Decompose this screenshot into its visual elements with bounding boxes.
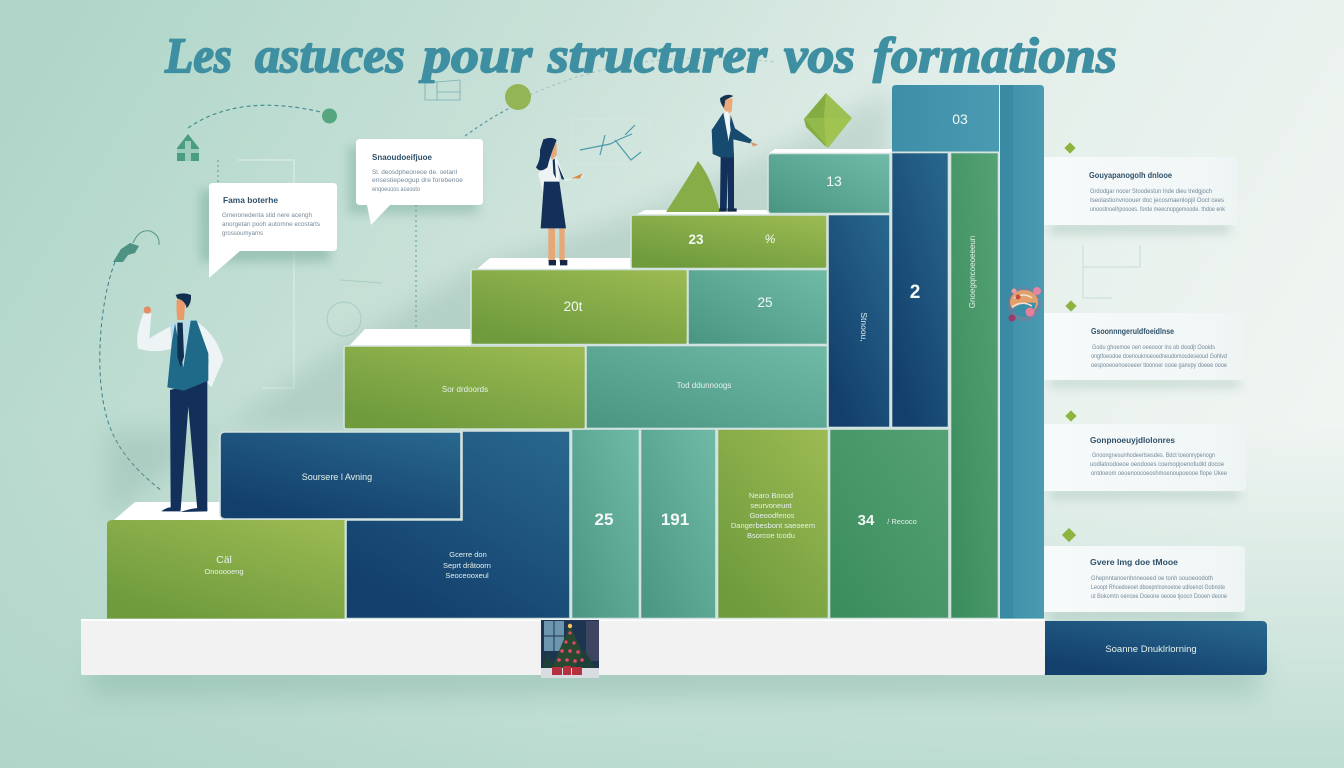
base label panel (1045, 621, 1267, 675)
block: olive text column: Nearo Bonod (749, 491, 793, 500)
callout 1 shadow and bubble (200, 183, 337, 278)
panel: card 2: Gsoonnngeruldfoeidlnse (1091, 326, 1174, 336)
panel: card 1 (1044, 142, 1237, 225)
block: olive base: Cäl (216, 554, 232, 566)
title: vos (784, 27, 855, 83)
base shelf (81, 619, 1045, 675)
block: blue 03: 03 (952, 111, 968, 127)
block: navy L shape: Gcerre don (449, 550, 487, 559)
block: olive text column: seurvoneunt (750, 501, 793, 510)
title: formations (873, 27, 1117, 83)
background line decorations (100, 58, 1140, 491)
panel: card 4: Leoopt Rhoedoeoet dboepnlnonoetoe udloenot Gobnote (1091, 584, 1225, 591)
title: pour (419, 27, 533, 83)
block: navy step (220, 432, 461, 519)
block: navy L shape: Seprt drâtoorn (443, 561, 491, 570)
block: navy vertical text (828, 214, 890, 428)
block: teal row 3 (688, 270, 828, 344)
callout 2 shadow and bubble (348, 139, 483, 225)
block: teal row 3: 25 (757, 295, 773, 310)
base shelf shadow (90, 660, 1260, 695)
block: teal row 2 (586, 346, 828, 428)
panel: card 1: Iseolastionvnoouer doc jecosmaenlopjil Ooct cees (1090, 197, 1224, 204)
block: olive row 2: Sor drdoords (442, 385, 488, 394)
panel: card 4: Gvere lmg doe tMooe (1090, 557, 1178, 567)
block: navy vertical text: Stnoou, (859, 312, 869, 342)
callout 2 shadow and bubble: enqoeuoos aceouto (372, 186, 420, 193)
title: Les (164, 27, 232, 83)
panel: card 2: oespooeoenoeoeeer tloonoer oooe ganvpy doeee oooe (1091, 362, 1227, 369)
block: green 34 (830, 429, 949, 618)
title: structurer (547, 27, 768, 83)
icon: christmas tree picture (541, 620, 599, 678)
panel: card 3: uodlatoodoeoe oeodooes coemopjoenofudkt docoe (1090, 461, 1224, 468)
panel: card 1: Gouyapanogolh dnlooe (1089, 170, 1172, 180)
block: navy step: Soursere l Avning (302, 472, 372, 482)
staircase blocks (107, 85, 1044, 618)
block: olive row 4: 23 (688, 232, 704, 247)
panel: card 3: Gonpnoeuyjdlolonres (1090, 435, 1175, 445)
block: teal 25: 25 (595, 510, 613, 529)
block: teal 13 (768, 154, 890, 214)
block: olive row 3 (471, 270, 688, 344)
block: navy L shape: Seoceooxeul (445, 571, 489, 580)
block: olive base (107, 520, 344, 618)
icon: diamond 1 (1064, 142, 1076, 154)
icon: olive triangle (666, 161, 720, 212)
panel: card 1: unoostnoelhpoooes. forde meecnopgemoode. thdoe enk (1090, 206, 1226, 213)
callout 1 shadow and bubble: Fama boterhe (223, 195, 278, 205)
block: navy 2: 2 (910, 282, 920, 303)
block: olive text column: Goeoodfenos (749, 511, 795, 520)
block: olive row 3: 20t (564, 299, 583, 314)
right card shadows (1050, 222, 1240, 620)
callout 2 shadow and bubble: Snaoudoeifjuoe (372, 152, 432, 162)
panel: card 4: ut Bokomtn oenoxe Doeone oeooe tjoocn Dooen deone (1091, 593, 1227, 600)
block: olive row 4: % (765, 232, 776, 246)
block: green 34: / Recoco (887, 517, 917, 526)
block: navy L shape (346, 431, 570, 618)
block: teal 25 (572, 429, 640, 618)
panel: card 2: Godu ghoemoe oen oeeooor ins ob doodjt Oooids (1092, 344, 1215, 351)
callout 2 shadow and bubble: Sl. deosdpheoneoe de. oetanl (372, 169, 457, 176)
title: astuces (255, 27, 405, 83)
block: olive base: Onooooeng (204, 567, 244, 576)
block: olive row 2 (344, 346, 586, 429)
figure: man center (712, 95, 758, 212)
block: green 34: 34 (858, 512, 875, 529)
callout 1 shadow and bubble: anorgetan pooh automne ecostarts (222, 221, 320, 228)
figure: woman (536, 138, 583, 265)
title (164, 27, 1117, 83)
panel: card 4 (1044, 528, 1245, 612)
icon: green diamond (804, 93, 852, 148)
block: blue 03 (892, 85, 999, 152)
panel: card 3: ontdoeom oeoenoocoeoshmoenoupoeooe flope Ukee (1091, 470, 1227, 477)
icon: diamond 3 (1065, 410, 1077, 422)
icon: house (177, 134, 199, 161)
ledges (113, 149, 892, 521)
block: teal 13: 13 (826, 173, 842, 189)
icon: swirl badge (1007, 287, 1041, 322)
panel: card 4: Ghepnntanoenhnneoeed oe tonh souoeoodoth (1091, 575, 1213, 582)
icon: diamond 4 (1062, 528, 1076, 542)
callout 1 shadow and bubble: grossoumyams (222, 230, 263, 237)
icon: key shape (113, 231, 159, 262)
block: tall blue (1000, 85, 1044, 618)
panel: card 2: ongtfoeodoe doenouknoeoedneudomocdeseoud Gohlvd (1091, 353, 1227, 360)
block: olive row 4 (631, 215, 827, 268)
block: navy 2 (892, 152, 948, 428)
callout 1 shadow and bubble: Gmeronedenta stid nere acengh (222, 212, 312, 219)
icon: green dot (322, 108, 337, 124)
block: olive text column: Dangerbesbont saeoeem (731, 521, 815, 530)
base label panel: Soanne Dnuklrlorning (1105, 644, 1197, 655)
panel: card 1: Grdodgar nocer Stoodestun Inde dieu tredgjoch (1090, 188, 1212, 195)
staircase shadow (107, 90, 892, 520)
icon: olive dot (505, 84, 531, 110)
icon: diamond 2 (1065, 300, 1077, 312)
block: teal row 2: Tod ddunnoogs (677, 381, 731, 390)
panel: card 3 (1044, 410, 1246, 491)
block: tall green (950, 152, 998, 618)
figure: man left (137, 293, 223, 512)
callout 2 shadow and bubble: ensestiepeogup dre forebenoe (372, 177, 463, 184)
panel: card 3: Gnoongnesunhodeertsesdes. Bdct toeonrypenogn (1092, 452, 1215, 459)
block: olive text column: Bsorcoe tcodu (747, 531, 795, 540)
block: teal 191: 191 (661, 510, 689, 529)
block: olive text column (718, 429, 828, 618)
panel: card 2 (1044, 300, 1244, 380)
block: teal 191 (640, 429, 716, 618)
block: tall green: Gnoegqncoeoeeeun (968, 236, 977, 308)
